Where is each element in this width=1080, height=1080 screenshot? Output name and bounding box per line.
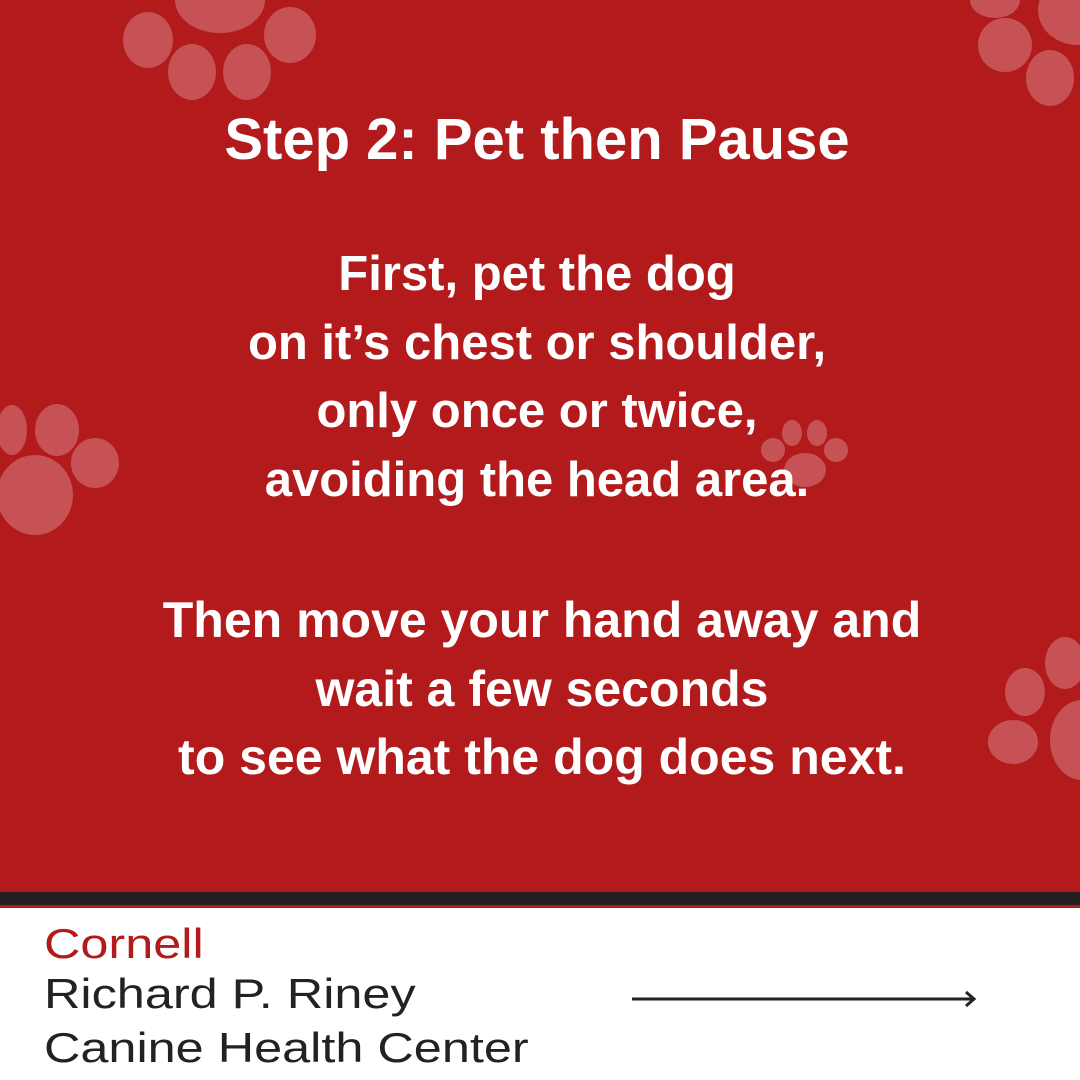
footer logo text: Richard P. Riney	[44, 970, 416, 1017]
body text: second paragraph	[163, 592, 921, 785]
arrow	[632, 991, 976, 1008]
footer logo text	[44, 920, 529, 1071]
title: Step 2: Pet then Pause	[224, 107, 850, 172]
body text: first paragraph: avoiding the head area.	[265, 452, 809, 506]
footer logo text: Cornell	[44, 920, 204, 967]
body text: first paragraph: First, pet the dog	[338, 247, 736, 301]
paw: bottom right	[988, 637, 1080, 780]
paw: top left	[123, 0, 316, 100]
body text: first paragraph: on it’s chest or shoulder,	[248, 316, 826, 370]
footer logo text: Canine Health Center	[44, 1024, 529, 1071]
paw: small middle	[761, 420, 848, 487]
body text: second paragraph: wait a few seconds	[316, 660, 768, 716]
paw: top right	[970, 0, 1080, 106]
body text: first paragraph: only once or twice,	[316, 384, 758, 438]
body text: first paragraph	[248, 247, 826, 506]
paw: left	[0, 404, 119, 535]
body text: second paragraph: Then move your hand away and	[163, 592, 921, 648]
body text: second paragraph: to see what the dog does next.	[178, 729, 906, 785]
